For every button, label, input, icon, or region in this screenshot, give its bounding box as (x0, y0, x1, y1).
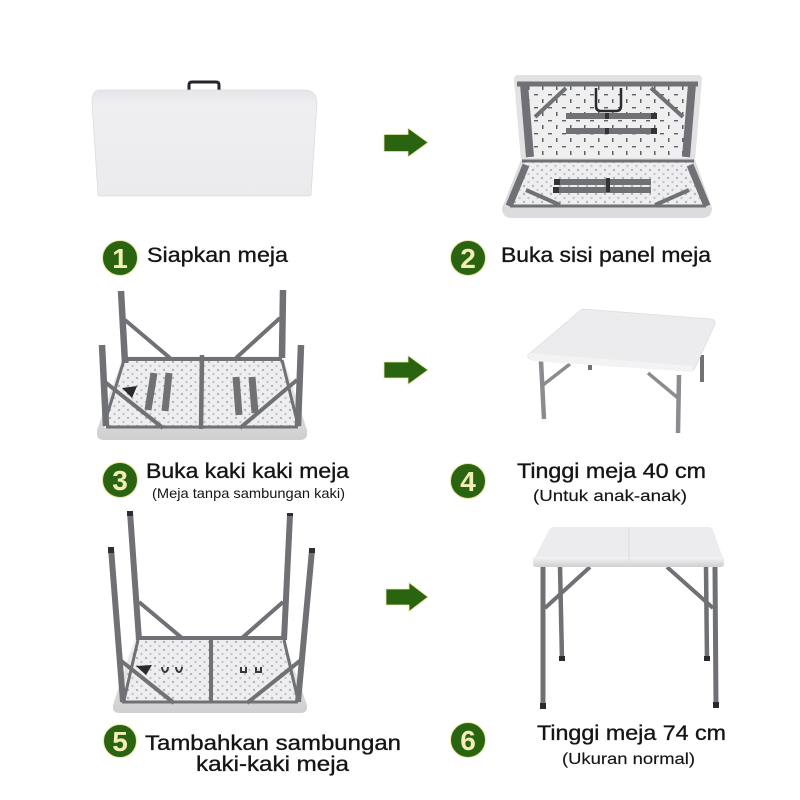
step 2 badge: 2 (460, 243, 476, 274)
braces (120, 602, 301, 703)
stored legs, lower (554, 182, 651, 190)
step 4 note: (Untuk anak-anak) (533, 488, 687, 505)
step 1 label: Siapkan meja (147, 244, 288, 267)
step 1 badge (102, 240, 138, 276)
frame bars (104, 355, 298, 429)
upper panel (514, 75, 702, 160)
lower frame (509, 165, 707, 206)
handle (122, 386, 137, 398)
legs (111, 512, 312, 702)
step 2: opened table panels (502, 75, 712, 218)
front legs (541, 361, 679, 433)
step 2 label: Buka sisi panel meja (501, 244, 711, 267)
frame bars (122, 636, 298, 703)
back legs (560, 566, 707, 660)
step 3 badge (102, 462, 138, 498)
step 5 label (145, 732, 401, 776)
step 5 badge: 5 (112, 726, 128, 757)
braces (545, 567, 713, 608)
lower panel (502, 160, 712, 218)
step 1 badge: 1 (112, 243, 128, 274)
arrow 3 (386, 582, 428, 612)
step 5 label: kaki-kaki meja (196, 753, 349, 776)
arrow 1 (384, 128, 428, 157)
table top (97, 356, 307, 440)
table top (533, 527, 724, 567)
stored legs, upper (566, 116, 655, 131)
front legs (543, 567, 716, 708)
step 3: upside-down table with legs open (97, 290, 307, 440)
step 5: upside-down table with leg extensions (108, 511, 315, 713)
arrow 2 (384, 356, 428, 384)
step 6: normal table, 74 cm (533, 527, 724, 709)
braces (543, 364, 678, 398)
legs (102, 290, 301, 426)
braces (105, 318, 297, 428)
step 4 badge: 4 (460, 466, 476, 497)
leg clips (162, 667, 261, 672)
step 3 label: Buka kaki kaki meja (146, 460, 349, 483)
back legs (590, 355, 702, 382)
step 6 badge (450, 722, 486, 758)
step 6 note: (Ukuran normal) (562, 751, 695, 768)
step 2 badge (450, 240, 486, 276)
step 6 label: Tinggi meja 74 cm (537, 722, 726, 745)
table top (113, 637, 307, 713)
icon: table handle (189, 82, 219, 95)
step 4: low table, 40 cm (528, 309, 715, 433)
step 3 badge: 3 (112, 465, 128, 496)
step 4 badge (450, 464, 486, 498)
step 5 badge (104, 724, 136, 758)
step 6 badge: 6 (460, 725, 476, 756)
upper frame (517, 84, 698, 161)
table top (528, 309, 715, 371)
detached leg sections (148, 373, 255, 415)
handle (596, 88, 621, 111)
folded table panel (92, 90, 317, 196)
leg caps (540, 656, 719, 709)
step 3 note: (Meja tanpa sambungan kaki) (152, 485, 345, 501)
handle (136, 665, 152, 675)
step 5 label: Tambahkan sambungan (145, 732, 401, 755)
step 4 label: Tinggi meja 40 cm (517, 460, 706, 483)
leg caps (108, 511, 315, 553)
step 1: folded table (92, 82, 317, 196)
